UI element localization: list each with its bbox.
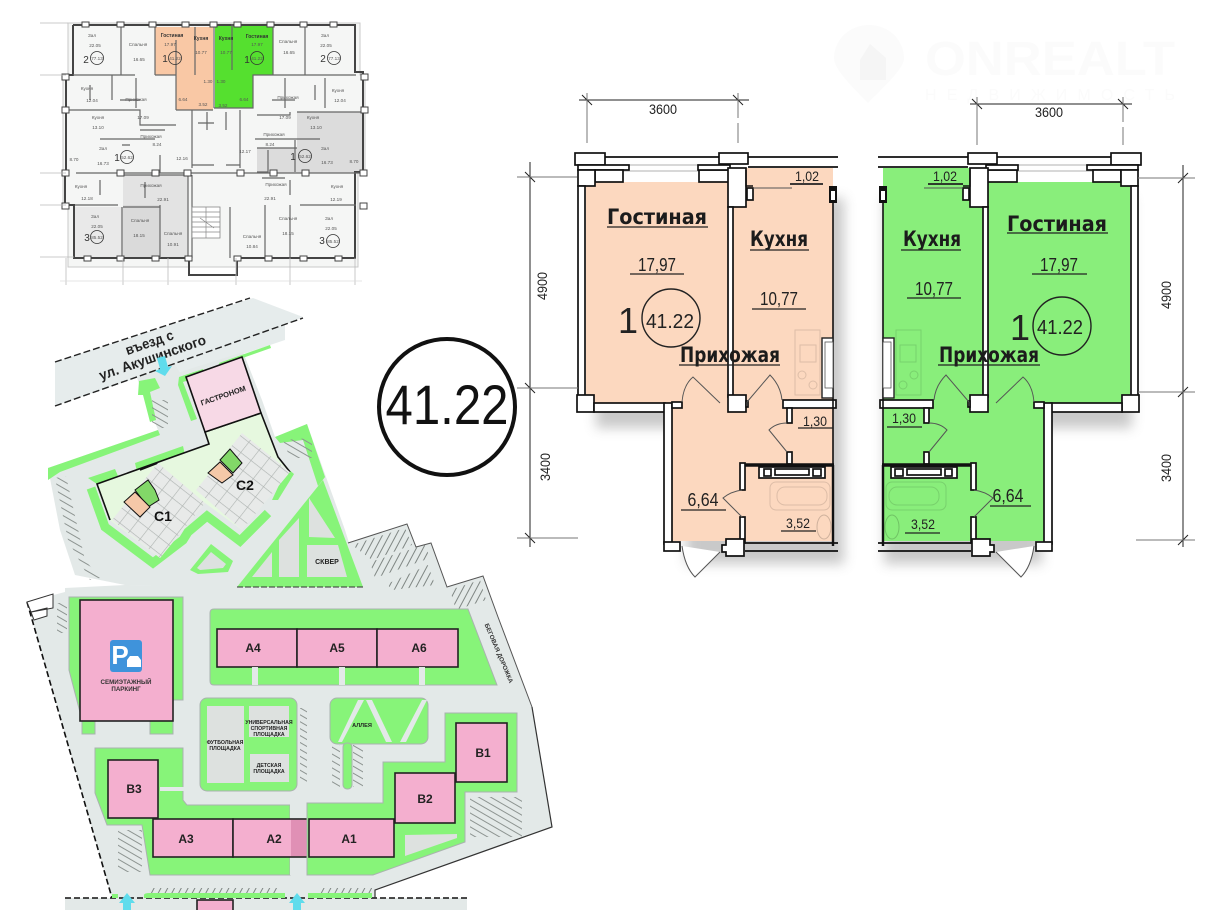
area circle [379,339,515,475]
dimensions [970,97,1195,547]
floor plan of the building: 22.91 [264,196,276,201]
floor plan of the building: Прихожая [277,95,299,100]
floor plan of the building: 6.64 [179,97,188,102]
building: C2 [196,433,290,530]
floor plan of the building: 17.09 [137,115,149,120]
dimensions [517,93,749,547]
site boundary [27,602,467,898]
lower site ground [27,524,552,898]
sports grounds: ПЛОЩАДКА [253,769,285,775]
A1 B2 B1 block: A1 [341,832,357,846]
floor plan of the building: 16.73 [97,161,109,166]
floor plan of the building: Кухня [92,115,105,120]
floor plan of the building: 22.05 [91,224,103,229]
entry road [55,298,303,406]
floor plan of the building: 8.24 [266,142,275,147]
floor plan of the building: 17.09 [279,115,291,120]
floor plan of the building: 1 [244,55,250,66]
alley: АЛЛЕЯ [352,723,372,729]
building: Гастроном [186,357,261,432]
A1 B2 B1 block: B2 [417,792,433,806]
floor plan of the building: Спальня [129,42,148,47]
floor plan of the building: 52.62 [299,154,311,159]
parking block [69,597,183,734]
floor plan of the building: Прихожая [263,132,285,137]
floor plan of the building: 8.24 [153,142,162,147]
upper site ground [48,352,363,587]
watermark: ONREALT [925,33,1175,86]
courtyard [97,413,290,558]
room labels: 1,02 [795,168,819,184]
floor plan of the building: 12.04 [334,98,346,103]
A4 A5 A6 block: A6 [411,641,427,655]
floor plan of the building: 8.70 [350,159,359,164]
floor plan of the building: 1.30 [204,79,213,84]
road label: въезд с [123,327,176,358]
floor plan of the building: Кухня [219,36,233,42]
floor plan of the building: 16.65 [133,57,145,62]
floor plan of the building: 16.73 [321,160,333,165]
floor plan of the building: 3 [319,236,325,247]
floor plan of the building: 10.84 [246,244,258,249]
floor plan of the building: Прихожая [265,182,287,187]
parking block: СЕМИЭТАЖНЫЙ [100,678,152,686]
dimensions: 4900 [1158,281,1174,309]
floor plan of the building: Спальня [243,234,262,239]
floor plan of the building: 1 [114,153,120,164]
alley [330,698,428,789]
floor plan of the building: Спальня [279,39,298,44]
room labels: 1 [1010,307,1030,348]
sports grounds: УНИВЕРСАЛЬНАЯ [245,720,293,726]
floor plan of the building: 13.10 [310,125,322,130]
floor plan of the building: 1.30 [217,79,226,84]
floor plan of the building: 18.15 [282,231,294,236]
floor plan of the building: 12.16 [176,156,188,161]
floor plan of the building: 85.52 [91,235,103,240]
green band around buildings [91,488,268,563]
floor plan of the building: Зал [91,214,99,219]
floor plan of the building: Зал [321,146,329,151]
parking block: ПАРКИНГ [111,686,141,693]
сквер: СКВЕР [315,559,339,566]
room labels [887,168,1108,533]
small green island [190,544,233,574]
floor plan of the building: 1 [290,152,296,163]
floor plan of the building: Зал [99,146,107,151]
floor plan of the building: Зал [88,33,96,38]
room labels: 1,30 [892,410,916,426]
running track label: БЕГОВАЯ ДОРОЖКА [483,623,514,685]
floor plan of the building: 8.70 [70,157,79,162]
floor plan wall piers [62,22,368,261]
building: C1 [112,463,205,558]
floor plan of the building: Гостиная [246,34,268,40]
watermark [834,25,1175,104]
road label: ул. Акушинского [97,331,208,383]
room labels: 1,02 [933,168,957,184]
watermark: НЕДВИЖИМОСТЬ [925,87,1175,104]
room labels: 41.22 [646,311,694,333]
bottom building [197,900,233,910]
room labels: 17,97 [638,255,676,275]
sports grounds: ПЛОЩАДКА [209,746,241,752]
room labels: 1 [618,300,638,341]
room labels: 41.22 [1037,317,1083,339]
B3 A3 A2 block: B3 [126,782,142,796]
floor plan of the building [40,22,368,285]
icon: entry arrow [155,356,172,376]
floor plan of the building: Прихожая [140,183,162,188]
dimensions: 3400 [537,453,553,481]
building: C1: C1 [154,508,172,524]
floor plan of the building: 12.17 [239,149,251,154]
floor plan of the building: 77.13 [328,56,340,61]
sports grounds: ПЛОЩАДКА [253,732,285,738]
floor plan of the building: 77.13 [91,56,103,61]
room labels: 17,97 [1040,255,1078,275]
room labels: 6,64 [992,486,1024,506]
sports grounds: ДЕТСКАЯ [257,763,282,769]
floor plan of the building: Спальня [279,216,298,221]
floor plan of the building: 3.52 [219,103,228,108]
sports grounds: ФУТБОЛЬНАЯ [207,740,244,746]
bottom ground strip [65,898,467,910]
floor plan of the building: Кухня [75,184,88,189]
floor plan of the building: 22.91 [157,197,169,202]
sports grounds [200,698,297,791]
A1 B2 B1 block [307,713,517,875]
floor plan of the building: Кухня [332,88,345,93]
room labels: 1,30 [803,413,827,429]
floor plan of the building: 6.64 [240,97,249,102]
floor plan of the building: 12.19 [330,197,342,202]
building: Гастроном: ГАСТРОНОМ [199,384,247,408]
floor plan of the building: 52.62 [121,155,133,160]
floor plan of the building: 85.52 [327,239,339,244]
floor plan of the building: 41.22 [169,56,181,61]
floor plan of the building: Спальня [131,218,150,223]
floor plan of the building: 22.05 [320,43,332,48]
A4 A5 A6 block [210,609,497,685]
room labels: 10,77 [915,279,953,299]
floor plan of the building: 10.77 [220,50,232,55]
floor plan of the building: 3 [84,233,90,244]
floor plan of the building: 41.22 [251,56,263,61]
room labels: 6,64 [688,490,718,510]
room labels: 3,52 [786,515,810,531]
B3 A3 A2 block: A2 [266,832,282,846]
apartment plan: orange [517,93,844,577]
floor plan of the building: Зал [321,33,329,38]
floor plan of the building: Прихожая [125,97,147,102]
floor plan stairs [192,207,220,238]
room labels: Гостиная [1007,212,1107,236]
floor plan of the building: Кухня [194,36,208,42]
floor plan of the building: 18.15 [133,233,145,238]
floor plan of the building: 3.52 [199,102,208,107]
building: C2: C2 [236,477,254,493]
floor plan of the building: Кухня [331,184,344,189]
сквер [237,480,363,587]
floor plan of the building: 16.65 [283,50,295,55]
floor plan of the building: 22.05 [89,43,101,48]
icon: south entry arrow left [119,893,135,910]
icon: parking: P [111,640,129,670]
room labels: Кухня [903,227,961,251]
room labels: 10,77 [760,289,798,309]
floor plan of the building: Кухня [81,86,94,91]
floor plan of the building: 2 [83,55,89,66]
floor plan of the building: 1 [162,54,168,65]
room labels: Кухня [750,227,808,251]
room labels: Гостиная [607,205,707,229]
room labels [607,168,833,531]
floor plan of the building: 10.77 [195,50,207,55]
floor plan of the building: 2 [320,54,326,65]
A4 A5 A6 block: A5 [329,641,345,655]
floor plan of the building: 10.91 [167,242,179,247]
B3 A3 A2 block: A3 [178,832,194,846]
A1 B2 B1 block: B1 [475,746,491,760]
floor plan of the building: Прихожая [140,134,162,139]
dimensions: 3600 [649,101,677,117]
floor plan of the building: 13.10 [92,125,104,130]
sports grounds: СПОРТИВНАЯ [251,726,288,732]
room labels: Прихожая [939,343,1039,367]
floor plan of the building: Зал [325,216,333,221]
A4 A5 A6 block: A4 [245,641,261,655]
icon: south entry arrow right [289,893,305,910]
floor plan of the building: 17.97 [164,42,176,47]
highlighted orange apartment on floor plan [155,27,213,110]
area circle: 41.22 [386,373,508,436]
floor plan of the building: 22.05 [325,226,337,231]
highlighted green apartment on floor plan [215,24,273,108]
apartment plan: green [878,97,1195,577]
B3 A3 A2 block [95,748,310,875]
room labels: 3,52 [911,516,935,532]
floor plan of the building: Гостиная [161,33,183,39]
room labels: Прихожая [680,343,780,367]
dimensions: 4900 [534,272,550,300]
floor plan of the building: 17.97 [251,42,263,47]
site plan [27,298,552,910]
dimensions: 3400 [1158,454,1174,482]
dimensions: 3600 [1035,104,1063,120]
floor plan of the building: 12.18 [81,196,93,201]
floor plan of the building: Кухня [307,115,320,120]
floor plan of the building: 12.04 [86,98,98,103]
floor plan of the building: Спальня [164,231,183,236]
